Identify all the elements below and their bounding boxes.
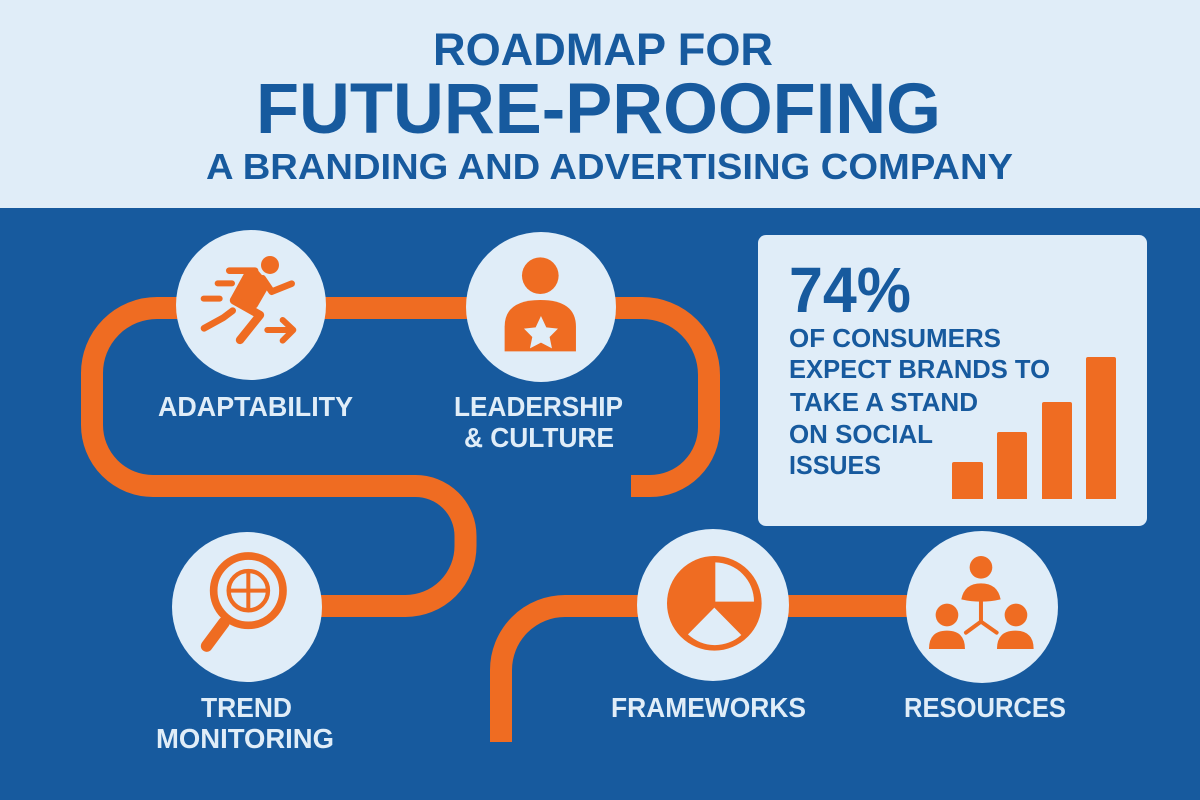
step: frameworks — [611, 529, 806, 723]
label: leadership and culture: LEADERSHIP — [454, 391, 623, 422]
panel: statistic callout — [758, 235, 1147, 526]
callout text: ON SOCIAL — [789, 419, 933, 449]
icon: pie chart — [667, 556, 762, 651]
label: adaptability: ADAPTABILITY — [158, 391, 353, 422]
icon: running person — [204, 256, 293, 341]
callout text: OF CONSUMERS — [789, 323, 1001, 353]
callout text: TAKE A STAND — [790, 387, 978, 417]
big number: 74%: 74% — [789, 254, 911, 326]
title: A BRANDING AND ADVERTISING COMPANY — [206, 146, 1013, 187]
title: FUTURE-PROOFING — [256, 70, 941, 149]
title: ROADMAP FOR — [433, 24, 773, 75]
label: trend monitoring — [156, 692, 334, 754]
label: trend monitoring: TREND — [201, 692, 292, 723]
label: leadership and culture: & CULTURE — [464, 422, 614, 453]
label: leadership and culture — [454, 391, 623, 453]
step: leadership and culture — [454, 232, 623, 453]
title — [206, 24, 1013, 187]
step: resources — [904, 531, 1066, 723]
roadmap path: lower route — [501, 606, 915, 742]
bar chart — [952, 357, 1116, 499]
step: trend monitoring — [156, 532, 334, 754]
label: trend monitoring: MONITORING — [156, 723, 334, 754]
step: adaptability — [158, 230, 353, 422]
header band — [0, 0, 1200, 208]
callout text — [789, 323, 1050, 480]
icon: person with star — [505, 257, 576, 351]
icon: magnifying glass — [207, 556, 283, 646]
label: frameworks: FRAMEWORKS — [611, 692, 806, 723]
callout text: EXPECT BRANDS TO — [789, 354, 1050, 384]
callout text: ISSUES — [789, 450, 881, 480]
roadmap path: upper route — [92, 308, 709, 606]
label: resources: RESOURCES — [904, 692, 1066, 723]
icon: connected team — [929, 556, 1034, 649]
